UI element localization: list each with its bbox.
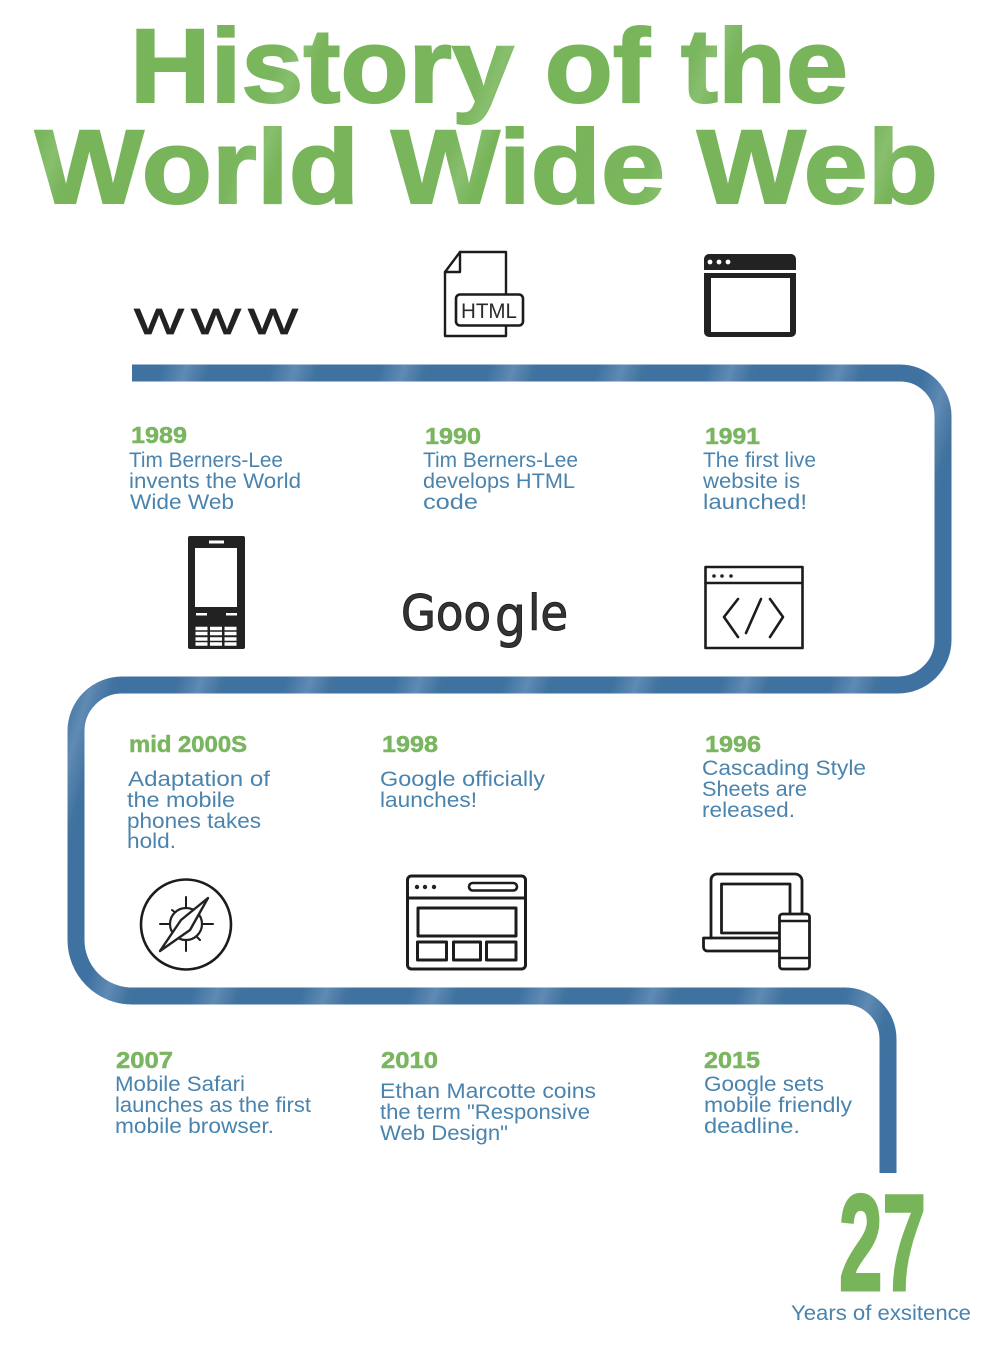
- milestone: 2010: the term "Responsive: [380, 1100, 590, 1124]
- milestone: 2015: deadline.: [704, 1114, 800, 1138]
- milestone: 1996: released.: [702, 798, 795, 822]
- milestone: 2010: Ethan Marcotte coins: [380, 1079, 596, 1103]
- milestone: 1990: develops HTML: [423, 469, 575, 493]
- icon: HTML file: [445, 252, 523, 336]
- milestone: mid 2000s: phones takes: [127, 809, 261, 833]
- milestone: 2007: 2007: [116, 1047, 173, 1073]
- stat: 27 years: [791, 1167, 971, 1325]
- milestone: mid 2000s: the mobile: [127, 788, 235, 812]
- milestone: 1998: launches!: [380, 788, 477, 812]
- milestone: 1990: 1990: [425, 423, 481, 449]
- title: History of the: [130, 8, 848, 125]
- milestone: 1990: Tim Berners-Lee: [423, 448, 578, 472]
- milestone: 2010: Web Design": [380, 1121, 508, 1145]
- icon: www: W: [248, 301, 298, 342]
- milestone: 1996: Sheets are: [702, 777, 807, 801]
- milestone: 1998: [380, 731, 545, 812]
- milestone: 2007: launches as the first: [115, 1093, 311, 1117]
- icon: mobile phone: [188, 536, 245, 649]
- milestone: mid 2000s: mid 2000S: [129, 731, 247, 757]
- milestone: mid 2000s: Adaptation of: [128, 767, 270, 791]
- title: World Wide Web: [35, 109, 938, 226]
- icon: www: [134, 301, 298, 342]
- milestone: 1996: [702, 731, 866, 822]
- milestone: 1991: 1991: [705, 423, 760, 449]
- milestone: 1991: [702, 423, 816, 514]
- milestone: 1996: 1996: [705, 731, 761, 757]
- timeline road: [76, 373, 943, 1173]
- icon: page layout window: [408, 876, 526, 969]
- milestone: 1998: 1998: [382, 731, 438, 757]
- icon: Google logo: Goo: [401, 585, 491, 642]
- icon: code window: [706, 567, 802, 648]
- milestone: 1989: [129, 422, 301, 514]
- milestone: 1991: website is: [702, 469, 800, 493]
- icon: browser window: [704, 254, 796, 337]
- milestone: 2015: mobile friendly: [704, 1093, 852, 1117]
- icon: Google logo: g: [495, 585, 526, 650]
- icon: www: W: [134, 301, 184, 342]
- icon: Google logo: le: [528, 585, 568, 642]
- milestone: 1998: Google officially: [380, 767, 545, 791]
- milestone: 1989: invents the World: [129, 469, 301, 493]
- milestone: 2015: [704, 1047, 852, 1138]
- icon: www: W: [191, 301, 241, 342]
- milestone: mid 2000s: hold.: [127, 829, 176, 853]
- milestone: 1990: code: [423, 490, 478, 514]
- milestone: 1991: The first live: [703, 448, 816, 472]
- icon: HTML file: HTML: [461, 300, 517, 323]
- milestone: 2007: mobile browser.: [115, 1114, 274, 1138]
- milestone: mid 2000s: [127, 731, 270, 853]
- milestone: 2010: 2010: [381, 1047, 438, 1073]
- milestone: 1991: launched!: [703, 490, 807, 514]
- icon: Google logo: [401, 585, 568, 650]
- milestone: 2015: 2015: [704, 1047, 760, 1073]
- icon: safari compass: [141, 880, 231, 970]
- stat: 27 years: 27: [839, 1167, 926, 1320]
- milestone: 2007: [115, 1047, 311, 1138]
- icon: responsive devices: [703, 874, 810, 969]
- milestone: 2010: [380, 1047, 596, 1145]
- milestone: 1996: Cascading Style: [702, 756, 866, 780]
- milestone: 1990: [423, 423, 578, 514]
- milestone: 1989: Wide Web: [130, 490, 234, 514]
- milestone: 1989: 1989: [131, 422, 187, 448]
- title: [35, 8, 938, 226]
- milestone: 1989: Tim Berners-Lee: [129, 448, 283, 472]
- milestone: 2015: Google sets: [704, 1072, 824, 1096]
- milestone: 2007: Mobile Safari: [115, 1072, 245, 1096]
- stat: 27 years: Years of exsitence: [791, 1301, 971, 1325]
